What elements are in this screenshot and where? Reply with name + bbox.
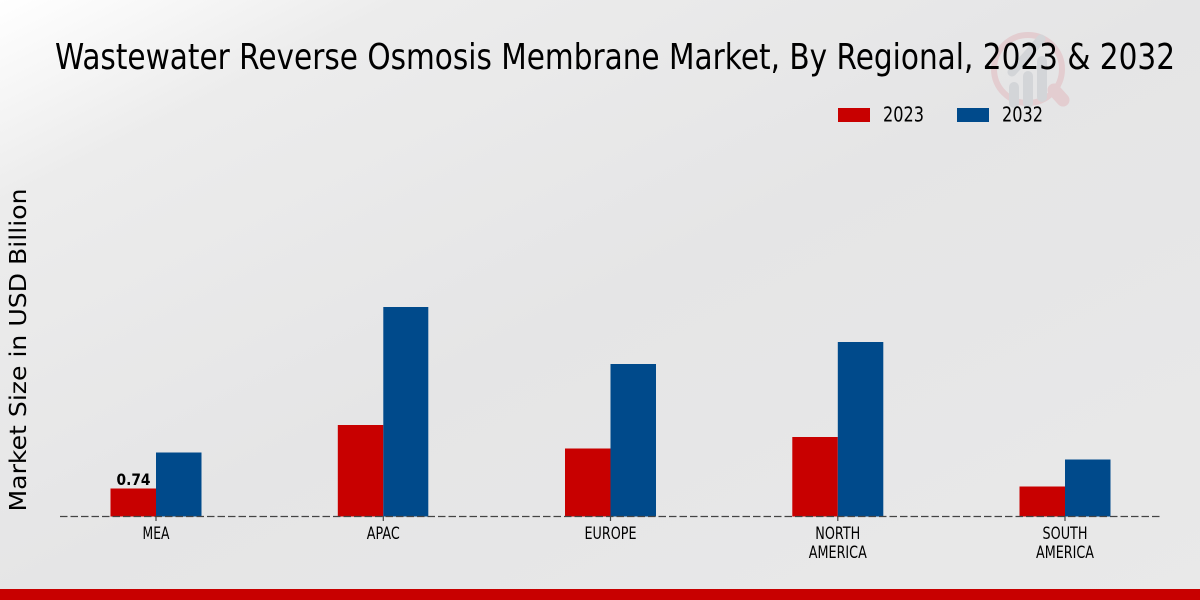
icon: watermark magnifier logo <box>994 35 1063 108</box>
y axis label: Market Size in USD Billion <box>6 188 32 512</box>
category labels: SOUTH <box>1042 524 1088 543</box>
legend item: 2032 <box>957 102 1043 126</box>
category labels <box>142 524 1095 562</box>
category labels: AMERICA <box>1036 543 1095 562</box>
bars: MEA <box>110 452 202 516</box>
category labels: NORTH <box>815 524 860 543</box>
footer bar <box>0 589 1200 600</box>
legend item: 2023 <box>838 102 924 126</box>
legend item: 2032: 2032 <box>1002 102 1043 126</box>
legend <box>838 102 1043 126</box>
bar chart <box>60 307 1160 562</box>
bars: SOUTH AMERICA <box>1020 460 1110 516</box>
category labels: EUROPE <box>584 524 636 543</box>
category labels: APAC <box>367 524 400 543</box>
baseline axis <box>60 516 1160 521</box>
value label: 0.74: 0.74 <box>116 470 150 489</box>
bars: APAC <box>338 307 428 516</box>
category labels: MEA <box>142 524 170 543</box>
legend item: 2023: 2023 <box>883 102 924 126</box>
bars: NORTH AMERICA <box>792 342 883 516</box>
bars: EUROPE <box>565 364 656 516</box>
category labels: AMERICA <box>809 543 867 562</box>
